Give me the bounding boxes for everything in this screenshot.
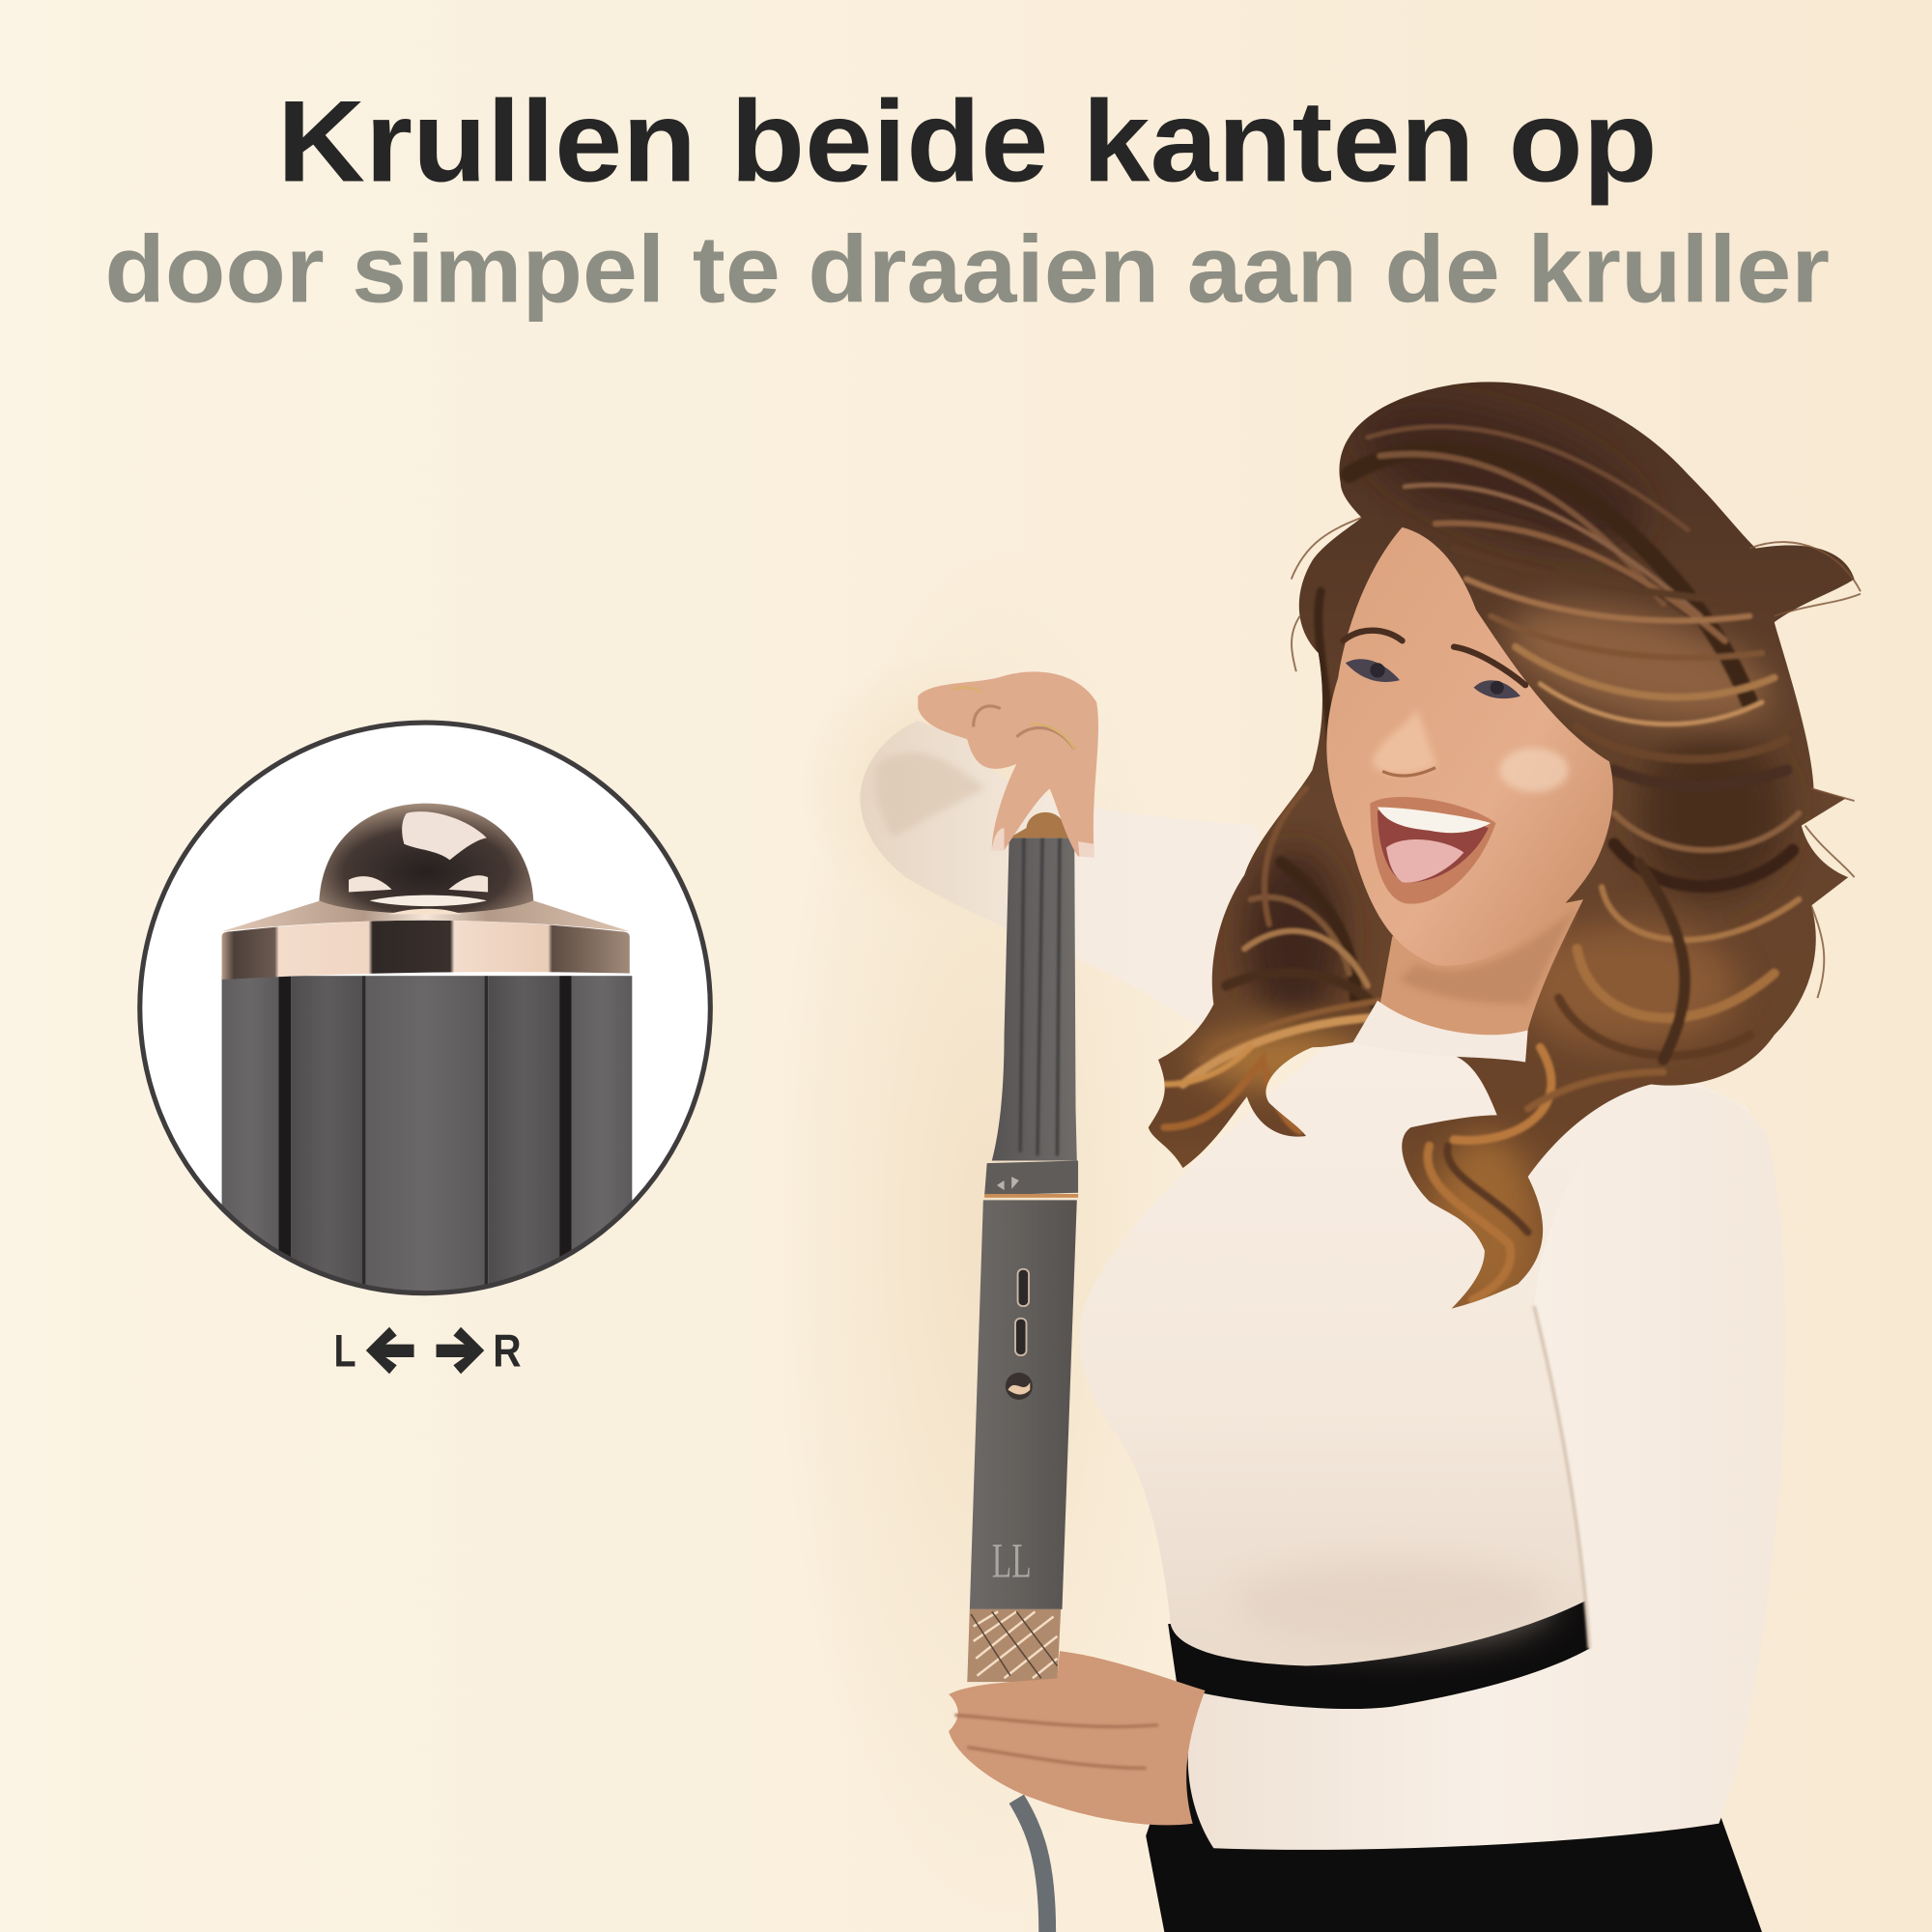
metallic brim — [222, 900, 630, 980]
hair strands — [1164, 427, 1799, 1300]
buttons — [1006, 1269, 1033, 1400]
power cord — [1016, 1799, 1047, 1932]
collar arrows — [997, 1177, 1019, 1190]
logo: LL — [992, 1535, 1032, 1589]
icon: left arrow — [366, 1327, 414, 1374]
bust shading — [1233, 1557, 1552, 1646]
subtitle: door simpel te draaien aan de kruller — [104, 215, 1830, 322]
mouth — [1370, 797, 1495, 904]
hair — [1149, 372, 1861, 1309]
sweater torso — [1080, 1001, 1749, 1665]
raised arm sleeve — [860, 721, 1269, 1041]
upper hand — [918, 670, 1101, 858]
cheek highlight — [1499, 748, 1569, 792]
eye: right — [1474, 680, 1520, 698]
rotating collar — [984, 1161, 1078, 1195]
grooved barrel body — [222, 976, 632, 1291]
handle — [970, 1200, 1077, 1609]
fingernails — [992, 828, 1094, 858]
illustration: woman — [860, 372, 1861, 1932]
title: Krullen beide kanten op — [277, 76, 1658, 206]
fluted barrel — [992, 812, 1077, 1161]
panel: product close-up circle — [140, 723, 710, 1346]
flyaway strands — [1292, 518, 1861, 998]
elbow shading — [875, 753, 985, 838]
direction legend — [334, 1326, 522, 1378]
eyebrows — [1343, 631, 1525, 685]
lower hand — [949, 1651, 1205, 1825]
close-up: curler top — [222, 804, 632, 1346]
trousers — [1146, 1589, 1762, 1932]
label L: L — [334, 1326, 356, 1378]
sweater arm — [1188, 1083, 1785, 1850]
hair tonal masses — [1164, 372, 1799, 1306]
curler — [967, 812, 1078, 1932]
gold tip — [1009, 812, 1074, 838]
neck and collar — [1353, 899, 1583, 1062]
metallic dome — [319, 804, 533, 914]
nose — [1373, 708, 1436, 775]
icon: right arrow — [437, 1327, 484, 1374]
face — [1326, 527, 1613, 966]
label R: R — [493, 1326, 522, 1378]
gold ring — [984, 1194, 1078, 1198]
arm inner crease — [1534, 1306, 1589, 1649]
air intake mesh — [967, 1609, 1061, 1682]
eye: left — [1346, 659, 1400, 682]
